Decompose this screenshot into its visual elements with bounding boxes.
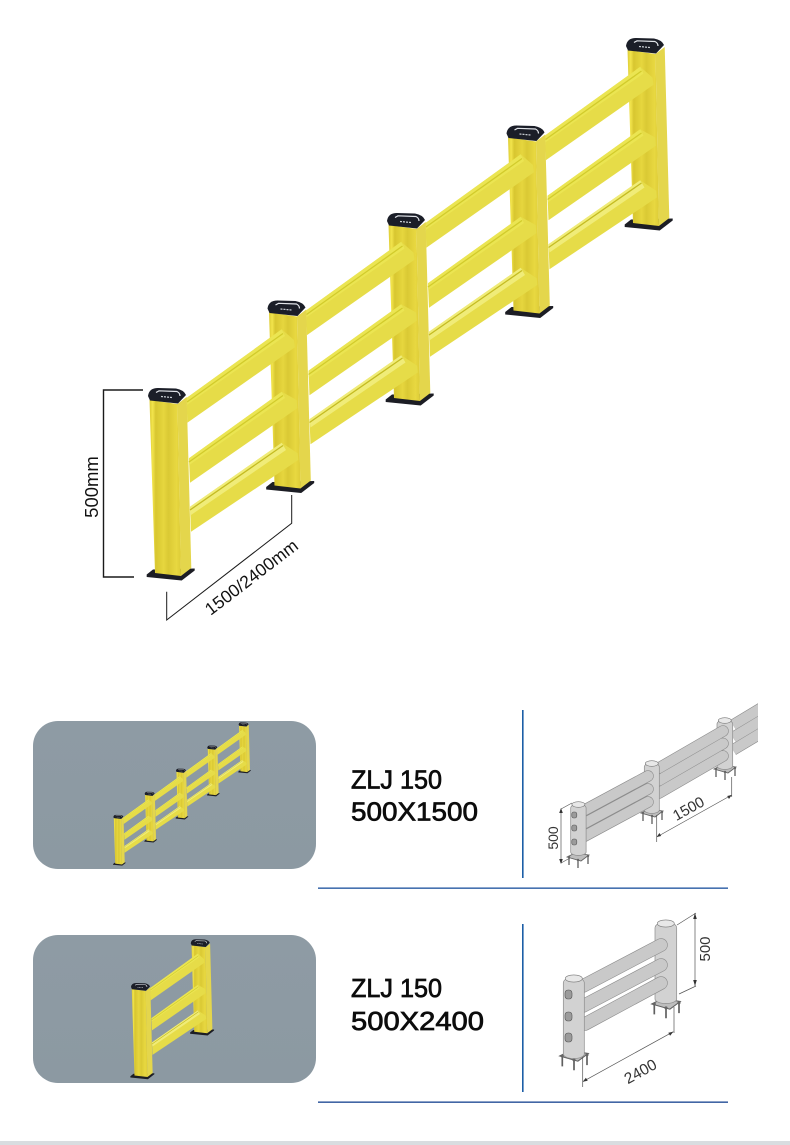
model label: ZLJ 150 500X1500: 500X1500 bbox=[351, 798, 478, 826]
technical drawing: 1500 span: 500 bbox=[545, 826, 561, 850]
divider: vertical row 1 bbox=[522, 710, 524, 878]
bottom strip bbox=[0, 1141, 790, 1145]
divider: horizontal row 1 bbox=[318, 888, 728, 889]
height dimension: 500mm: 500mm bbox=[81, 456, 102, 518]
panel: 1500 fence preview bbox=[33, 721, 316, 869]
divider: horizontal row 2 bbox=[318, 1102, 728, 1103]
technical drawing: 2400 span: 2400 bbox=[622, 1056, 660, 1088]
technical drawing: 1500 span: 1500 bbox=[670, 794, 708, 825]
length dimension: 1500/2400mm bbox=[167, 495, 302, 620]
height dimension: 500mm bbox=[81, 390, 143, 577]
technical drawing: 2400 span: 500 bbox=[697, 936, 714, 962]
length dimension: 1500/2400mm: 1500/2400mm bbox=[201, 535, 302, 619]
model label: ZLJ 150 500X2400: ZLJ 150 bbox=[351, 975, 442, 1003]
technical drawing: 2400 span bbox=[560, 913, 714, 1088]
model label: ZLJ 150 500X1500 bbox=[351, 766, 478, 826]
panel: 2400 fence preview bbox=[33, 935, 316, 1083]
model label: ZLJ 150 500X2400: 500X2400 bbox=[351, 1008, 484, 1036]
technical drawing: 1500 span bbox=[545, 704, 768, 868]
divider: vertical row 2 bbox=[522, 924, 524, 1092]
model label: ZLJ 150 500X1500: ZLJ 150 bbox=[351, 766, 442, 794]
main fence illustration bbox=[147, 38, 673, 580]
model label: ZLJ 150 500X2400 bbox=[351, 975, 484, 1036]
